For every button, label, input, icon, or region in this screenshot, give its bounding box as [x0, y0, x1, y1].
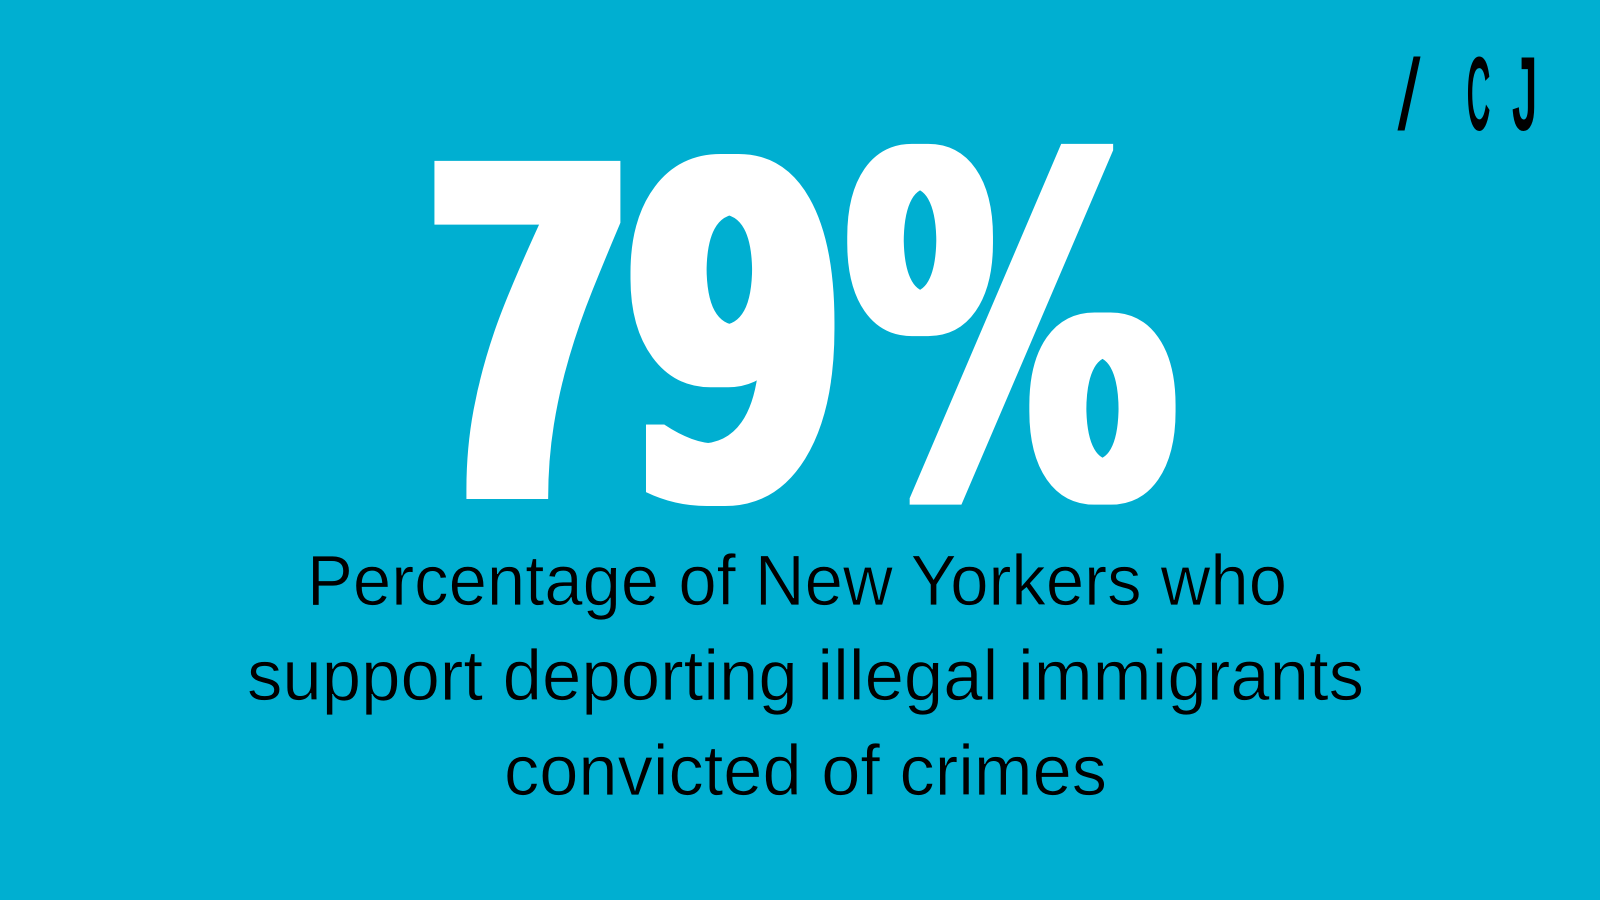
description text: convicted of crimes [504, 732, 1107, 811]
big statistic: 79%: 7 [439, 63, 616, 596]
logo: / CJ: C [1467, 38, 1490, 150]
logo: / CJ [1398, 38, 1537, 150]
description text: Percentage of New Yorkers who [307, 542, 1287, 621]
logo: / CJ: / [1398, 40, 1420, 150]
logo: / CJ: J [1513, 40, 1537, 150]
description text [247, 542, 1364, 811]
big statistic: 79% [439, 59, 1178, 606]
big statistic: 79%: % [844, 59, 1178, 606]
big statistic: 79%: 9 [623, 72, 846, 605]
description text: support deporting illegal immigrants [247, 637, 1364, 716]
